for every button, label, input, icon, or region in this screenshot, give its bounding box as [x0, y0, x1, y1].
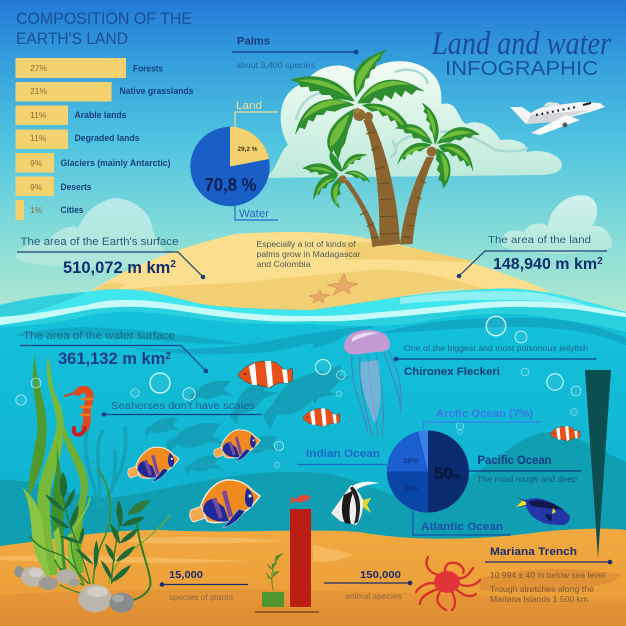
- pie chart: oceans: Atlantic Ocean: [421, 521, 503, 533]
- sea floor: [0, 529, 626, 626]
- starfish small: [309, 290, 330, 303]
- fish: [238, 361, 293, 388]
- pie chart: land and water: [190, 100, 278, 220]
- callout: water surface area: 2: [165, 351, 171, 362]
- waves: [0, 289, 626, 332]
- callout: mariana trench: Mariana Trench: [490, 546, 577, 558]
- pie chart: land and water: 70,8 %: [204, 175, 256, 195]
- title: land and water infographic: [431, 26, 611, 80]
- bar chart: land composition: 1%: [30, 205, 43, 215]
- pie chart: land and water: Water: [239, 208, 269, 220]
- crab: [416, 557, 480, 610]
- bar chart: land composition: 27%: [30, 63, 47, 73]
- bar chart: land composition: 11%: [30, 110, 47, 120]
- small palm fronds: [302, 152, 371, 208]
- right palm fronds: [395, 103, 480, 188]
- mariana trench depth wedge: [585, 370, 611, 558]
- bar chart: land composition: Deserts: [60, 182, 92, 192]
- pie chart: oceans: 18%: [403, 456, 418, 465]
- callout: seahorses: Seahorses don't have scales: [111, 400, 255, 412]
- small red fish: [291, 495, 311, 504]
- text: palms note: and Colombia: [256, 259, 311, 269]
- callout: animal species: [324, 569, 412, 601]
- palms: [290, 49, 480, 247]
- big palm coconuts: [353, 108, 373, 121]
- bar chart: land composition: Glaciers (mainly Antarctic): [60, 158, 170, 168]
- cloud: right small: [502, 195, 612, 253]
- callout: plant species: 15,000: [169, 569, 203, 581]
- sea body: [0, 289, 626, 560]
- callout: animal species: 150,000: [360, 569, 401, 581]
- background seaweed: [86, 425, 126, 508]
- callout: animal species: animal species: [345, 591, 402, 601]
- teal hills: [0, 432, 626, 560]
- ribbons: [26, 355, 47, 500]
- fish silhouettes: [145, 362, 355, 476]
- bar chart: land composition: 11%: [30, 133, 47, 143]
- callout: earth surface area: The area of the Earth's surface: [20, 236, 178, 248]
- pie chart: oceans: The most rough and deep: [477, 474, 577, 484]
- airplane: [510, 102, 605, 135]
- callout: earth surface area: [17, 236, 205, 279]
- callout: water surface area: [20, 330, 208, 373]
- left plants: [14, 355, 170, 613]
- bar chart: land composition: Degraded lands: [74, 133, 140, 143]
- callout: palms: about 3,400 species: [236, 60, 315, 70]
- callout: water surface area: The area of the water surface: [23, 330, 175, 342]
- seahorse: [65, 390, 92, 435]
- text: palms note: [256, 239, 361, 269]
- text: palms note: palms grow in Madagascar: [256, 249, 361, 259]
- big palm fronds: [290, 49, 425, 160]
- pie chart: oceans: [297, 408, 581, 535]
- bar chart: species comparison: [255, 509, 319, 612]
- moorish idol: [331, 482, 380, 525]
- pie chart: land and water: 29,2 %: [238, 146, 258, 153]
- callout: plant species: [160, 569, 248, 602]
- callout: chironex fleckeri: [394, 343, 596, 378]
- bar chart: land composition: Arable lands: [74, 110, 126, 120]
- blue tang: [516, 498, 570, 525]
- pie chart: oceans: Indian Ocean: [306, 448, 380, 460]
- heading: composition of earth's land: [16, 10, 192, 48]
- bar chart: land composition: [16, 58, 194, 220]
- callout: mariana trench: 10 994 ± 40 m below sea level: [490, 570, 605, 580]
- callout: palms: [232, 36, 358, 70]
- pie chart: oceans: Arctic Ocean (7%): [436, 408, 533, 420]
- callout: seahorses: [102, 400, 262, 417]
- callout: land area: The area of the land: [488, 234, 591, 246]
- callout: land area: 148,940 m km: [493, 256, 597, 273]
- callout: land area: 2: [597, 256, 603, 267]
- island: [85, 232, 548, 316]
- bubbles: [16, 316, 581, 468]
- callout: chironex fleckeri: Chironex Fleckeri: [404, 366, 500, 378]
- bar chart: land composition: Forests: [133, 64, 163, 74]
- bar chart: land composition: 9%: [30, 158, 43, 168]
- pie chart: land and water: Land: [236, 100, 262, 112]
- callout: mariana trench: Trough stretches along the: [490, 584, 594, 594]
- title: land and water infographic: INFOGRAPHIC: [445, 57, 598, 80]
- callout: earth surface area: 2: [170, 259, 176, 270]
- callout: palms: Palms: [237, 36, 270, 48]
- bar chart: land composition: 9%: [30, 182, 43, 192]
- callout: plant species: species of plants: [169, 592, 233, 602]
- pie chart: oceans: 50%: [434, 464, 460, 483]
- cloud: left small: [15, 198, 170, 268]
- rocks: [14, 566, 134, 613]
- starfish: [327, 273, 358, 295]
- bar chart: land composition: Cities: [60, 205, 84, 215]
- callout: water surface area: 361,132 m km: [58, 350, 165, 368]
- cloud: behind palms: [266, 61, 562, 178]
- heading: composition of earth's land: EARTH'S LAND: [16, 30, 128, 48]
- text: palms note: Especially a lot of kinds of: [256, 239, 356, 249]
- sky background: [0, 0, 626, 316]
- jellyfish: [344, 330, 401, 438]
- trunks: [344, 120, 434, 247]
- callout: earth surface area: 510,072 m km: [63, 259, 170, 277]
- heading: composition of earth's land: COMPOSITION OF THE: [16, 10, 192, 28]
- bar chart: land composition: 21%: [30, 86, 47, 96]
- callout: chironex fleckeri: One of the biggest and most poisonous jellyfish: [404, 343, 588, 353]
- callout: mariana trench: Mariana Islands 1 500 km: [490, 594, 588, 604]
- bar chart: land composition: Native grasslands: [120, 86, 194, 96]
- pie chart: oceans: 25%: [403, 484, 418, 493]
- water dark swaths: [12, 318, 626, 354]
- callout: mariana trench: [485, 546, 612, 604]
- callout: land area: [457, 234, 607, 278]
- pie chart: oceans: Pacific Ocean: [478, 455, 552, 467]
